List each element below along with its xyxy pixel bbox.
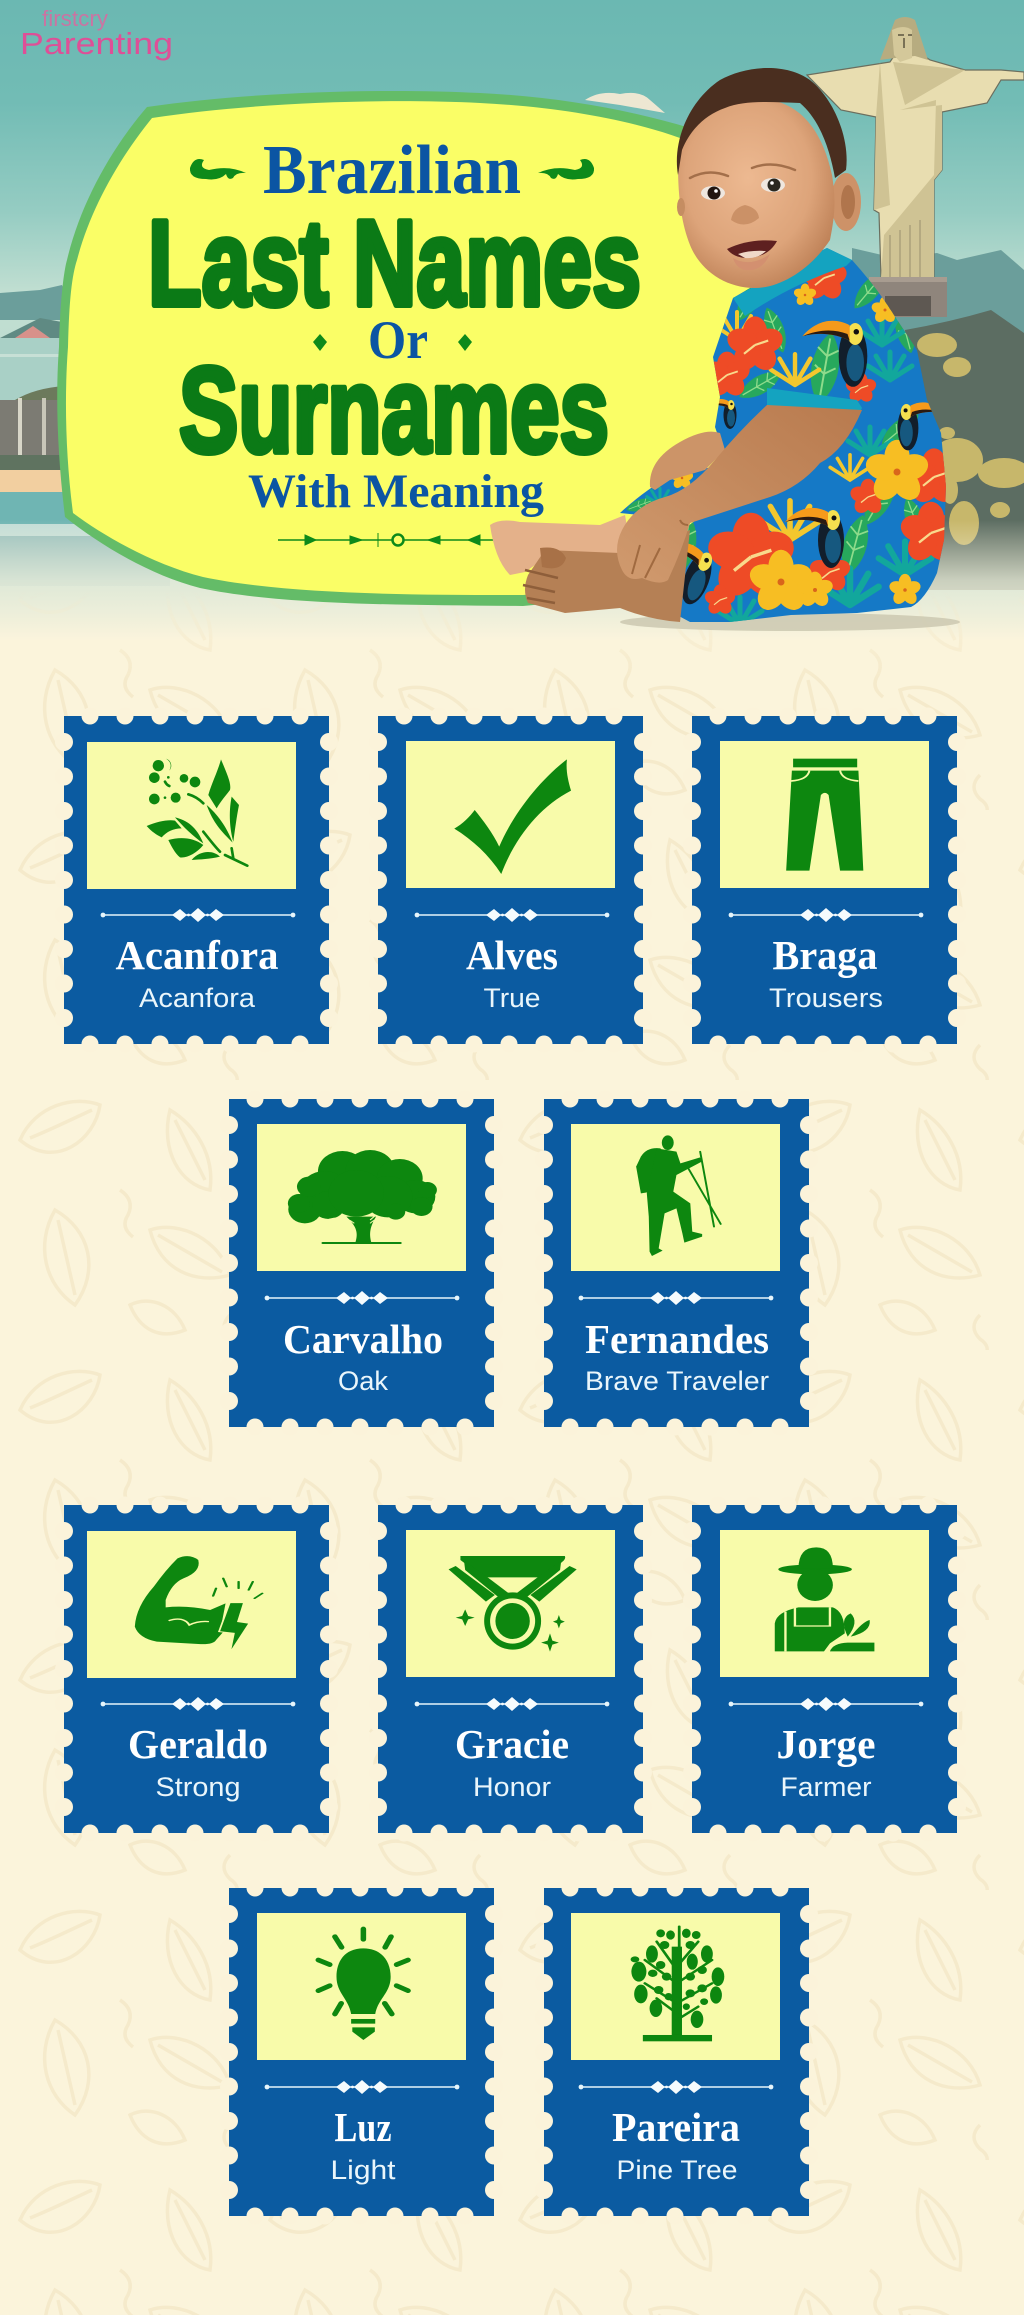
icon panel	[406, 1530, 615, 1677]
icon: check mark	[454, 759, 571, 874]
statue pedestal	[869, 277, 947, 317]
shirt collar	[733, 248, 852, 316]
baby nose	[731, 205, 759, 225]
divider	[101, 1697, 295, 1711]
stamp card: Jorge	[683, 1496, 966, 1842]
leaf pattern background	[0, 590, 1024, 2315]
stamp card: Carvalho	[220, 1090, 503, 1436]
meaning: Pine Tree	[616, 2155, 738, 2185]
meaning: Farmer	[780, 1772, 872, 1802]
surname: Alves	[466, 932, 558, 978]
baby mouth	[727, 240, 777, 270]
icon: flexed arm with bolt	[135, 1556, 262, 1653]
icon panel	[571, 1913, 780, 2060]
stamp card: Pareira	[535, 1880, 818, 2224]
baby	[490, 68, 965, 631]
meaning: Strong	[156, 1772, 240, 1802]
title blob	[57, 91, 775, 606]
cloud	[585, 93, 665, 113]
stamp card: Acanfora	[55, 708, 338, 1052]
stamp card: Braga	[683, 708, 966, 1052]
divider	[729, 1697, 923, 1711]
title line: Last Names: Last Names	[148, 195, 641, 331]
divider	[265, 1291, 459, 1305]
icon panel	[257, 1124, 466, 1271]
ornament: left flourish	[190, 159, 246, 179]
header scenery	[0, 0, 1024, 640]
divider	[579, 1291, 773, 1305]
brand logo: firstcry	[42, 6, 108, 31]
surname: Acanfora	[116, 932, 278, 978]
icon panel	[87, 1531, 296, 1678]
ornament: diamonds	[313, 334, 472, 351]
divider	[415, 908, 609, 922]
brand logo: Parenting	[20, 26, 173, 61]
icon panel	[87, 742, 296, 889]
title line: With Meaning: With Meaning	[248, 465, 544, 518]
divider	[729, 908, 923, 922]
stamp card: Fernandes	[535, 1090, 818, 1436]
title line: Or: Or	[368, 310, 428, 370]
baby face	[678, 99, 834, 288]
surname: Fernandes	[585, 1316, 769, 1362]
meaning: Oak	[338, 1366, 388, 1396]
title text	[148, 132, 641, 547]
stamp card: Geraldo	[55, 1496, 338, 1842]
near leg and foot	[523, 530, 690, 622]
icon: pear tree	[631, 1927, 724, 2041]
icon panel	[571, 1124, 780, 1271]
green mountain right	[905, 310, 1024, 590]
icon panel	[406, 741, 615, 888]
divider	[579, 2080, 773, 2094]
meaning: Brave Traveler	[585, 1366, 769, 1396]
stamp card: Alves	[369, 708, 652, 1052]
meaning: True	[484, 983, 540, 1013]
baby near cheek ear	[677, 198, 685, 216]
divider	[415, 1697, 609, 1711]
surname: Pareira	[612, 2104, 740, 2150]
fade to cream	[0, 520, 1024, 640]
stamp card: Gracie	[369, 1496, 652, 1842]
surname: Carvalho	[283, 1316, 443, 1362]
brand logo	[20, 6, 173, 61]
clothing	[620, 248, 965, 625]
icon: trousers	[786, 759, 863, 871]
icon panel	[257, 1913, 466, 2060]
far mountains right	[852, 248, 1024, 340]
surname: Gracie	[455, 1721, 569, 1767]
ornament: line	[278, 533, 493, 547]
title line: Surnames: Surnames	[179, 342, 609, 478]
surname: Braga	[772, 932, 878, 978]
icon: oak tree	[288, 1150, 437, 1243]
far hand	[650, 432, 725, 490]
baby eyes	[701, 178, 785, 200]
icon: leaves and berries	[147, 759, 247, 866]
meaning: Light	[330, 2155, 396, 2185]
icon: hiker	[636, 1135, 721, 1256]
icon panel	[720, 1530, 929, 1677]
surname: Luz	[334, 2104, 392, 2150]
icon panel	[720, 741, 929, 888]
meaning: Acanfora	[139, 983, 256, 1013]
left coast landscape	[0, 285, 170, 586]
stamp card: Luz	[220, 1880, 503, 2224]
baby eyebrows	[690, 164, 795, 178]
meaning: Trousers	[769, 983, 883, 1013]
icon: light bulb	[318, 1929, 408, 2040]
near arm and hand	[617, 405, 862, 583]
baby hair	[677, 68, 847, 178]
sleeve cuff	[767, 388, 862, 418]
title line: Brazilian: Brazilian	[263, 132, 521, 209]
surname: Jorge	[776, 1721, 876, 1767]
surname: Geraldo	[128, 1721, 268, 1767]
icon: medal	[449, 1556, 577, 1652]
ground shadow	[620, 613, 960, 631]
icon: farmer	[775, 1547, 874, 1651]
ornament: right flourish	[538, 159, 594, 179]
far foot	[490, 515, 632, 575]
baby ear	[831, 173, 861, 231]
Christ the Redeemer statue	[807, 17, 1024, 277]
meaning: Honor	[473, 1772, 551, 1802]
divider	[265, 2080, 459, 2094]
divider	[101, 908, 295, 922]
